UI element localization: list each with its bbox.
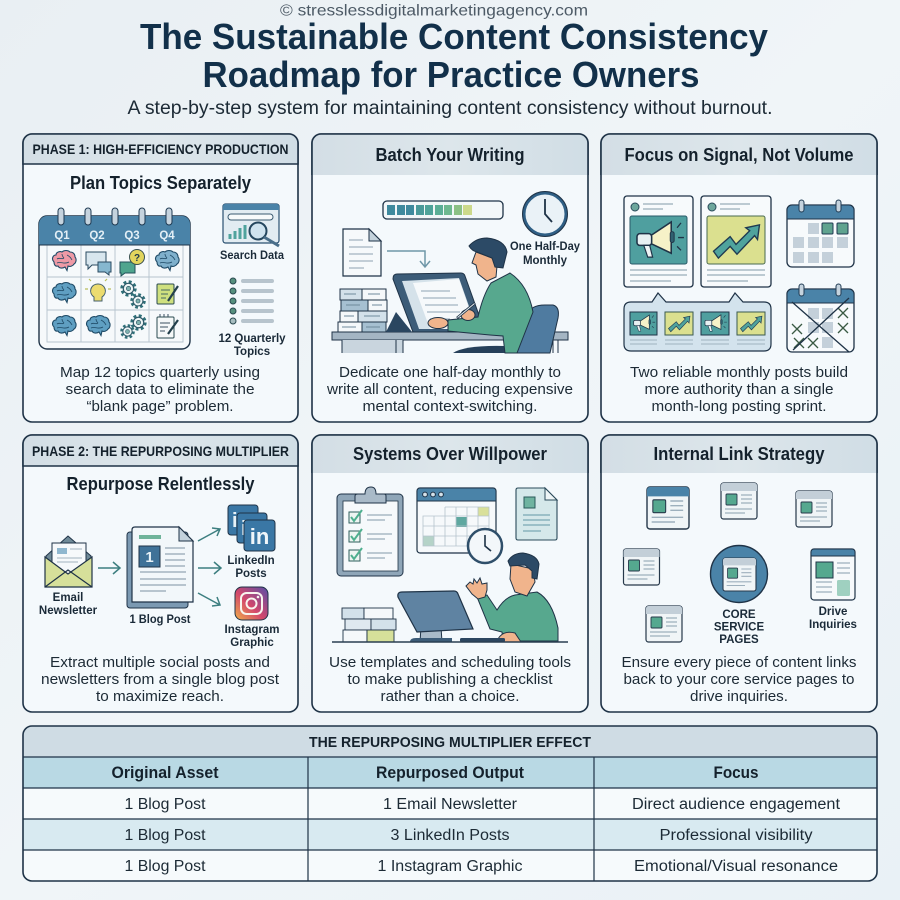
table row 2: 3 LinkedIn Posts [390, 827, 510, 844]
heading: internal link strategy: Internal Link Strategy [654, 443, 825, 464]
body text: Dedicate one half-day monthly to [339, 364, 561, 381]
arrow: document to screen [387, 251, 430, 267]
heading: focus on signal: Focus on Signal, Not Volume [624, 144, 854, 165]
panel: focus on signal [601, 134, 877, 422]
label: one half-day monthly: Monthly [523, 255, 568, 267]
icon: clipboard checklist [337, 487, 403, 576]
label: drive inquiries: Inquiries [809, 619, 857, 631]
body text: write all content, reducing expensive [326, 381, 573, 398]
panel: internal link strategy [601, 435, 877, 712]
label: 1 blog post: 1 Blog Post [130, 614, 191, 626]
table row 2: 1 Blog Post [124, 827, 206, 844]
arrow: email to blog [98, 562, 120, 574]
body text: to maximize reach. [96, 688, 224, 705]
icon: blog post [127, 527, 193, 608]
watermark: © stresslessdigitalmarketingagency.com [280, 2, 588, 20]
label: core service pages: PAGES [719, 634, 759, 646]
heading: plan topics: Plan Topics Separately [70, 172, 252, 193]
body text: rather than a choice. [380, 688, 520, 705]
progress bar [383, 201, 503, 219]
icon: quarterly calendar: Q2 [89, 230, 105, 242]
phase 2 heading: PHASE 2: THE REPURPOSING MULTIPLIER [32, 443, 289, 459]
icon: monitor [398, 591, 473, 642]
body text: mental context-switching. [362, 398, 538, 415]
body text: to make publishing a checklist [348, 671, 553, 688]
body text: Use templates and scheduling tools [329, 654, 571, 671]
table title: THE REPURPOSING MULTIPLIER EFFECT [309, 734, 591, 751]
label: core service pages: CORE [722, 609, 756, 621]
subtitle: A step-by-step system for maintaining content consistency without burnout. [128, 97, 772, 119]
icon: linkedin stack: in [250, 524, 269, 549]
icon: document [343, 229, 381, 276]
icon: quarterly calendar [39, 208, 190, 349]
table header row: Focus [714, 763, 758, 782]
table header row: Original Asset [112, 763, 219, 782]
icon: instagram [235, 587, 268, 620]
icon: core service hub [710, 546, 768, 602]
panel: plan topics separately [23, 134, 298, 422]
icon: template document [516, 488, 557, 540]
page thumbnails [624, 483, 832, 642]
label: email newsletter: Newsletter [39, 605, 98, 617]
table row 3: Emotional/Visual resonance [634, 858, 838, 875]
icon: person at desk [460, 553, 558, 642]
icon: quarterly calendar: Q1 [54, 230, 70, 242]
body text: Extract multiple social posts and [50, 654, 270, 671]
icon: linkedin stack [228, 505, 275, 551]
label: core service pages [714, 609, 764, 646]
icon: stack of books [342, 608, 396, 642]
icon: linkedin stack: i [241, 518, 247, 540]
label: core service pages: SERVICE [714, 622, 764, 634]
label: one half-day monthly [510, 241, 581, 267]
icon: linkedin stack: i [232, 510, 238, 532]
title: The Sustainable Content Consistency [140, 16, 769, 57]
table row 3: 1 Instagram Graphic [378, 858, 523, 875]
post card: megaphone [624, 196, 693, 287]
icon: quarterly calendar: Q3 [124, 230, 140, 242]
label: email newsletter: Email [53, 592, 83, 604]
label: one half-day monthly: One Half-Day [510, 241, 581, 253]
body text [622, 654, 856, 705]
label: instagram graphic [225, 624, 279, 649]
label: instagram graphic: Graphic [230, 637, 274, 649]
heading: repurpose relentlessly: Repurpose Relentlessly [66, 473, 255, 494]
desk [332, 332, 568, 353]
panel: systems over willpower [312, 435, 588, 712]
table header row: Repurposed Output [376, 763, 524, 782]
icon: crossed-out calendar [787, 284, 854, 352]
body text: Ensure every piece of content links [622, 654, 856, 671]
table row 2 [124, 827, 813, 844]
phase 1 heading: PHASE 1: HIGH-EFFICIENCY PRODUCTION [32, 141, 288, 157]
icon: stack of books [338, 289, 387, 333]
table row 3 [124, 858, 838, 875]
heading: batch your writing: Batch Your Writing [376, 144, 524, 165]
label: linkedin posts [227, 555, 275, 580]
icon: writing person [428, 238, 533, 353]
label: drive inquiries: Drive [819, 606, 847, 618]
icon: search data [223, 204, 279, 246]
body text [41, 654, 280, 705]
icon: inquiry page [811, 549, 855, 600]
icon: scheduling calendar [417, 488, 496, 553]
icon: blog post: 1 [145, 549, 154, 566]
body text [329, 654, 571, 705]
label: search data: Search Data [220, 250, 285, 262]
body text [630, 364, 848, 415]
table row 1: Direct audience engagement [632, 796, 841, 813]
icon: chair [515, 305, 558, 353]
label: 12 quarterly topics [218, 333, 286, 358]
body text: back to your core service pages to [624, 671, 854, 688]
icon: small clock [468, 529, 502, 563]
table row 1: 1 Blog Post [124, 796, 206, 813]
icon: email newsletter [45, 536, 92, 587]
body text: Two reliable monthly posts build [630, 364, 848, 381]
panel: repurpose relentlessly [23, 435, 298, 712]
icon: quarterly calendar: Q4 [159, 230, 175, 242]
arrows: blog to channels [198, 528, 221, 606]
table row 3: 1 Blog Post [124, 858, 206, 875]
label: 12 quarterly topics: 12 Quarterly [218, 333, 286, 345]
table row 1: 1 Email Newsletter [383, 796, 517, 813]
icon: topic list [230, 278, 272, 324]
table: repurposing multiplier effect [23, 726, 877, 881]
label: email newsletter [39, 592, 98, 617]
strip of repurposed posts [624, 293, 771, 351]
title: Roadmap for Practice Owners [202, 54, 700, 95]
label: linkedin posts: LinkedIn [227, 555, 275, 567]
panel: batch your writing [312, 134, 588, 422]
body text: newsletters from a single blog post [41, 671, 280, 688]
body text: “blank page” problem. [86, 398, 234, 415]
table row 2: Professional visibility [660, 827, 813, 844]
body text [326, 364, 573, 415]
label: 12 quarterly topics: Topics [234, 346, 270, 358]
body text: month-long posting sprint. [652, 398, 826, 415]
label: drive inquiries [809, 606, 857, 631]
desk line [332, 641, 568, 643]
body text: drive inquiries. [690, 688, 788, 705]
post card: trend [701, 196, 771, 287]
label: linkedin posts: Posts [235, 568, 267, 580]
title [140, 16, 769, 95]
label: instagram graphic: Instagram [225, 624, 279, 636]
icon: clock [522, 192, 568, 236]
heading: systems over willpower: Systems Over Willpower [353, 443, 547, 464]
body text [60, 364, 260, 415]
body text: Map 12 topics quarterly using [60, 364, 260, 381]
body text: more authority than a single [644, 381, 834, 398]
icon: tablet screen [386, 273, 485, 332]
icon: quarterly calendar: ? [134, 253, 140, 264]
icon: consistent calendar [787, 200, 854, 267]
table row 1 [124, 796, 841, 813]
body text: search data to eliminate the [66, 381, 254, 398]
table header row [112, 763, 758, 782]
